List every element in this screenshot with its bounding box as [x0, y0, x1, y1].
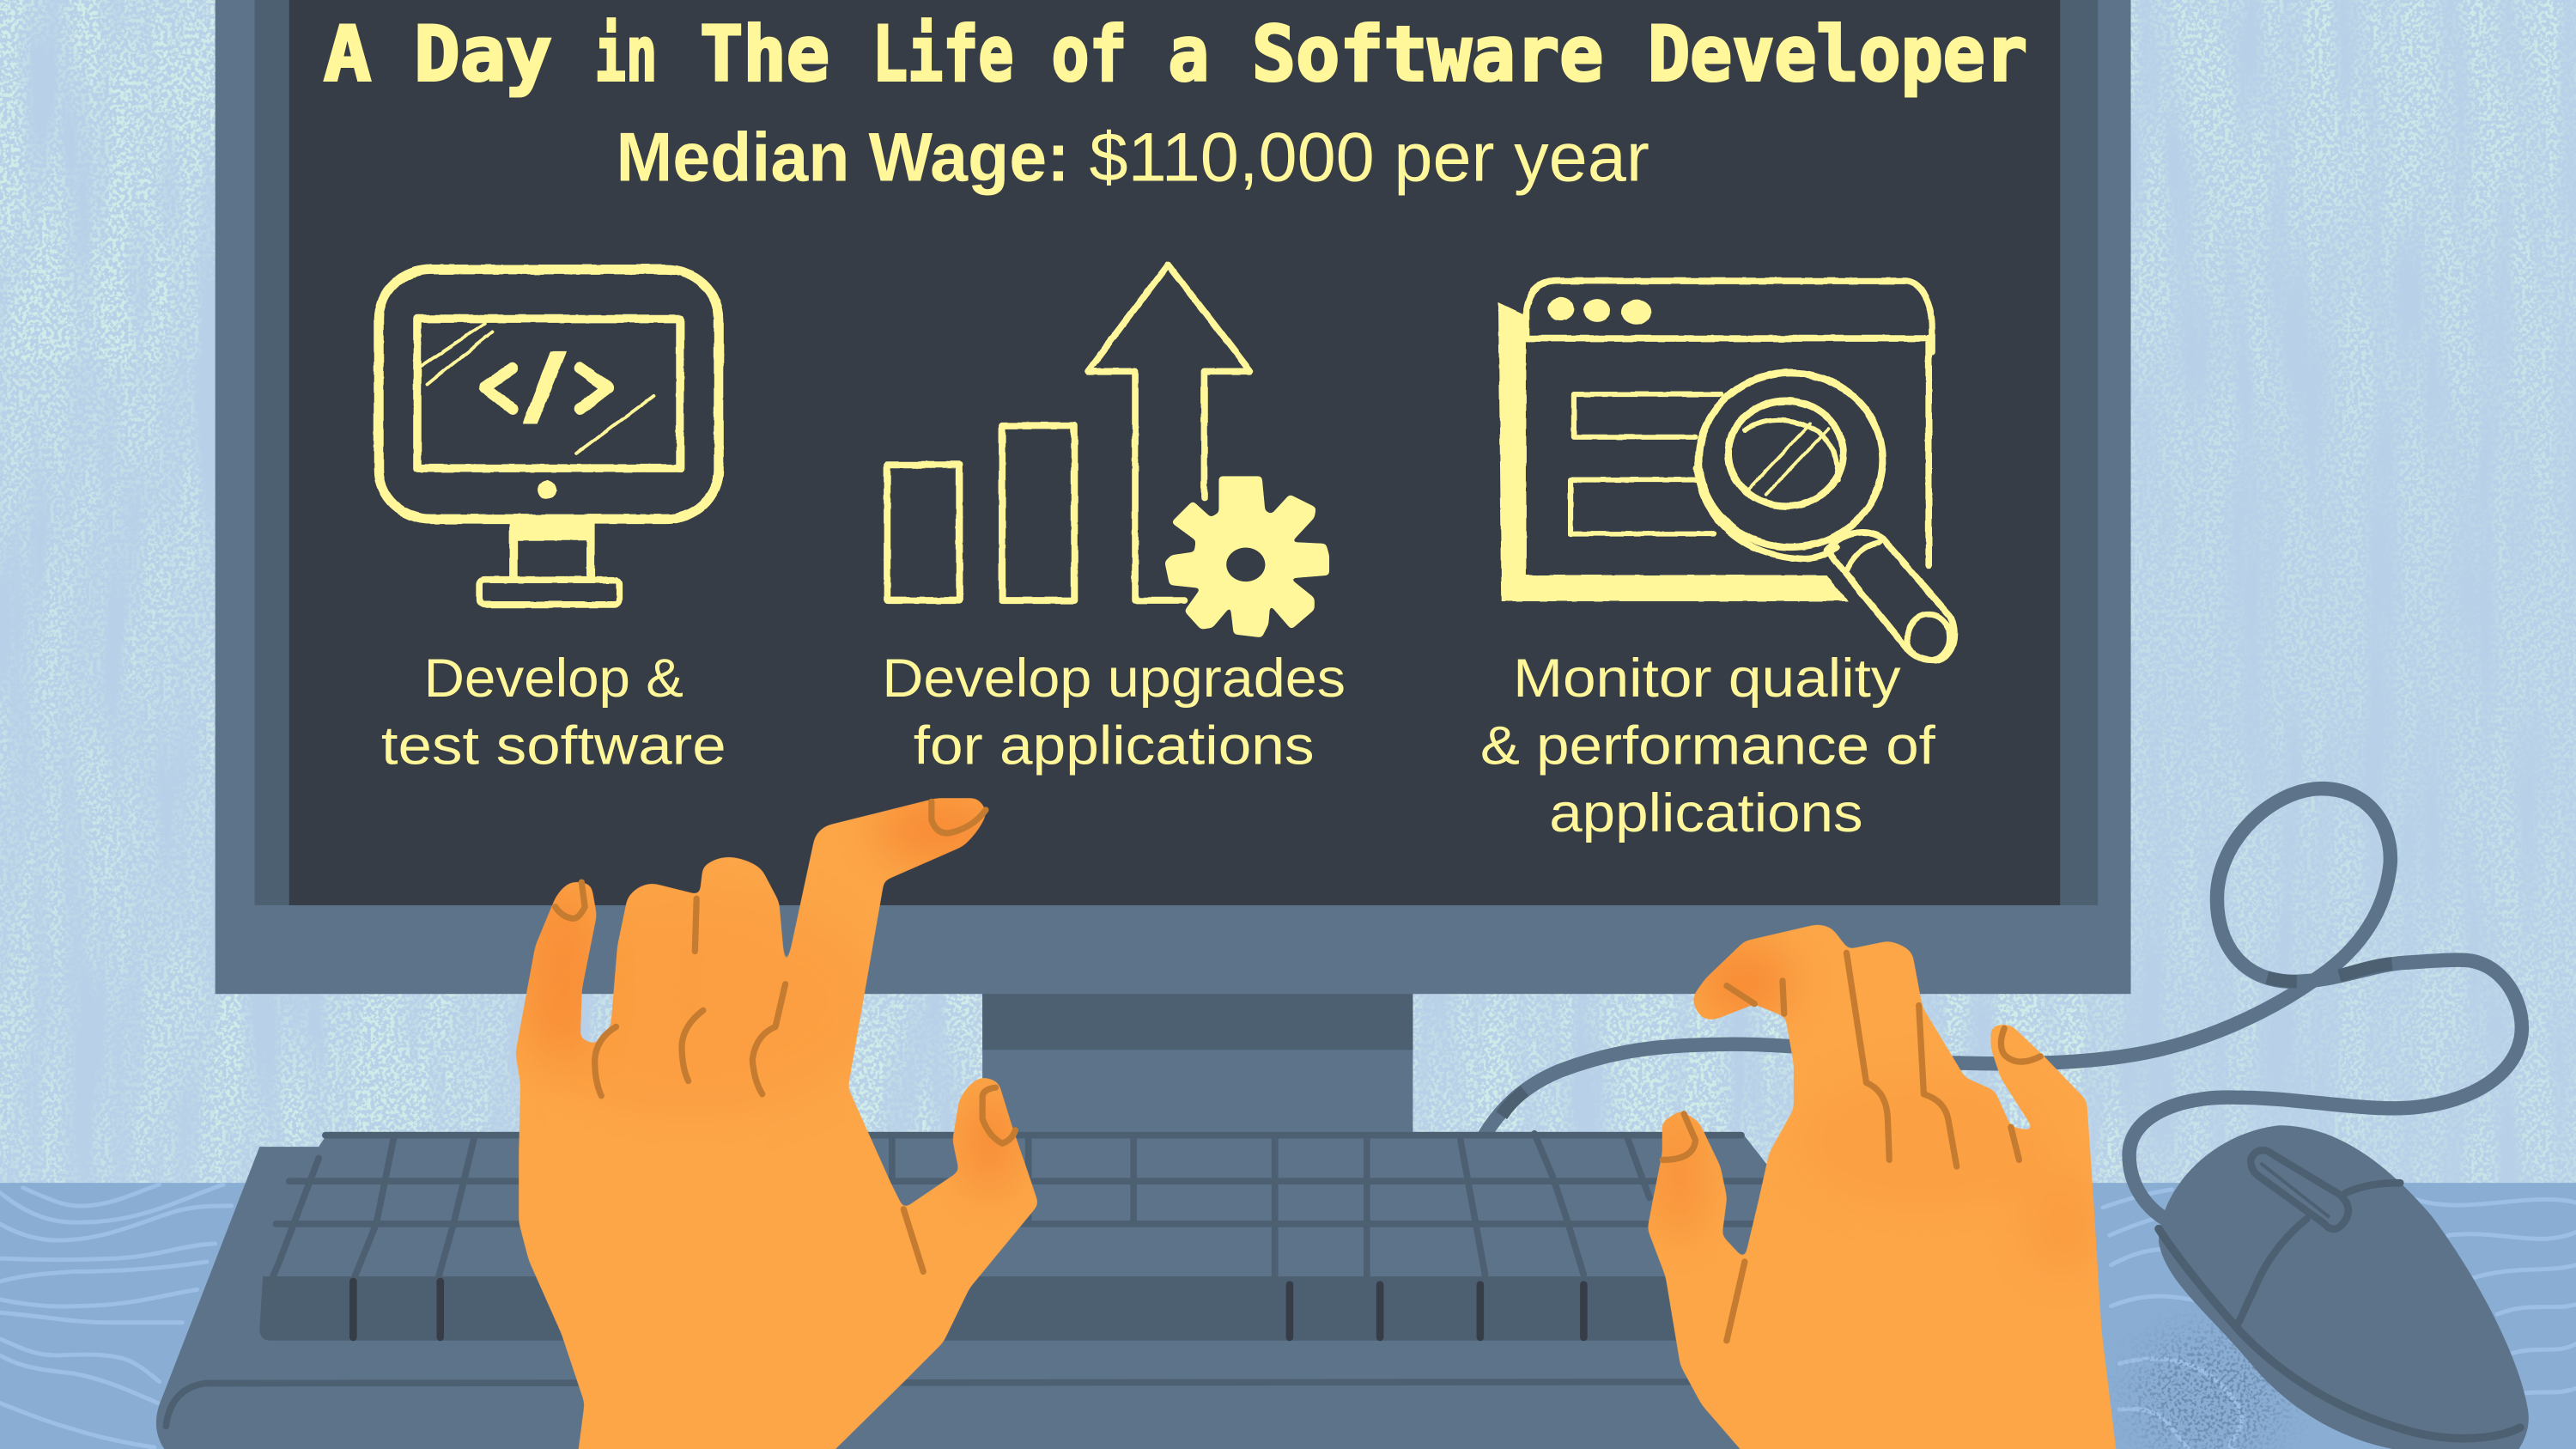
- left hand: [501, 794, 1038, 1449]
- desk shadow under mouse: [2136, 1334, 2283, 1449]
- left hand nails and knuckle creases: [556, 801, 1015, 1271]
- title: Software: [1252, 10, 1603, 99]
- label: develop upgrades: [882, 648, 1346, 776]
- title: in: [595, 10, 657, 99]
- label: monitor quality: & performance of: [1480, 715, 1935, 776]
- title: Developer: [1648, 10, 2027, 99]
- keyboard: [156, 1132, 2087, 1449]
- title: A: [324, 10, 371, 99]
- right hand nails and knuckle creases: [1662, 953, 2040, 1341]
- label: develop and test software: [381, 648, 726, 776]
- title: The: [700, 10, 829, 99]
- right hand: [1648, 925, 2119, 1449]
- label: develop upgrades: Develop upgrades: [882, 648, 1346, 709]
- icon: desktop monitor with code: [379, 270, 719, 605]
- screen: [289, 0, 2060, 905]
- computer monitor: [216, 0, 2131, 1142]
- title: Life: [872, 10, 1013, 99]
- title: [324, 10, 2027, 99]
- title: a: [1168, 10, 1209, 99]
- mouse cable: [1484, 788, 2522, 1219]
- median wage: [616, 119, 1649, 196]
- icon: browser window with magnifier: [1498, 281, 1954, 661]
- label: develop and test software: Develop &: [424, 648, 683, 709]
- desk with wavy grain: [0, 1183, 2576, 1449]
- mouse: [2159, 1125, 2529, 1449]
- icon: rising bars, arrow and gear: [887, 265, 1329, 637]
- monitor frame: [216, 0, 2131, 994]
- median wage: Median Wage:: [616, 119, 1070, 196]
- monitor stand: [982, 986, 1413, 1142]
- monitor inner bezel: [255, 0, 2098, 905]
- median wage: $110,000 per year: [1089, 119, 1649, 196]
- label: monitor quality: Monitor quality: [1513, 648, 1901, 709]
- label: monitor quality: applications: [1549, 783, 1863, 843]
- title: of: [1051, 10, 1127, 99]
- title: Day: [414, 10, 552, 99]
- label: monitor quality: [1480, 648, 1935, 843]
- label: develop upgrades: for applications: [914, 715, 1315, 776]
- label: develop and test software: test software: [381, 715, 726, 776]
